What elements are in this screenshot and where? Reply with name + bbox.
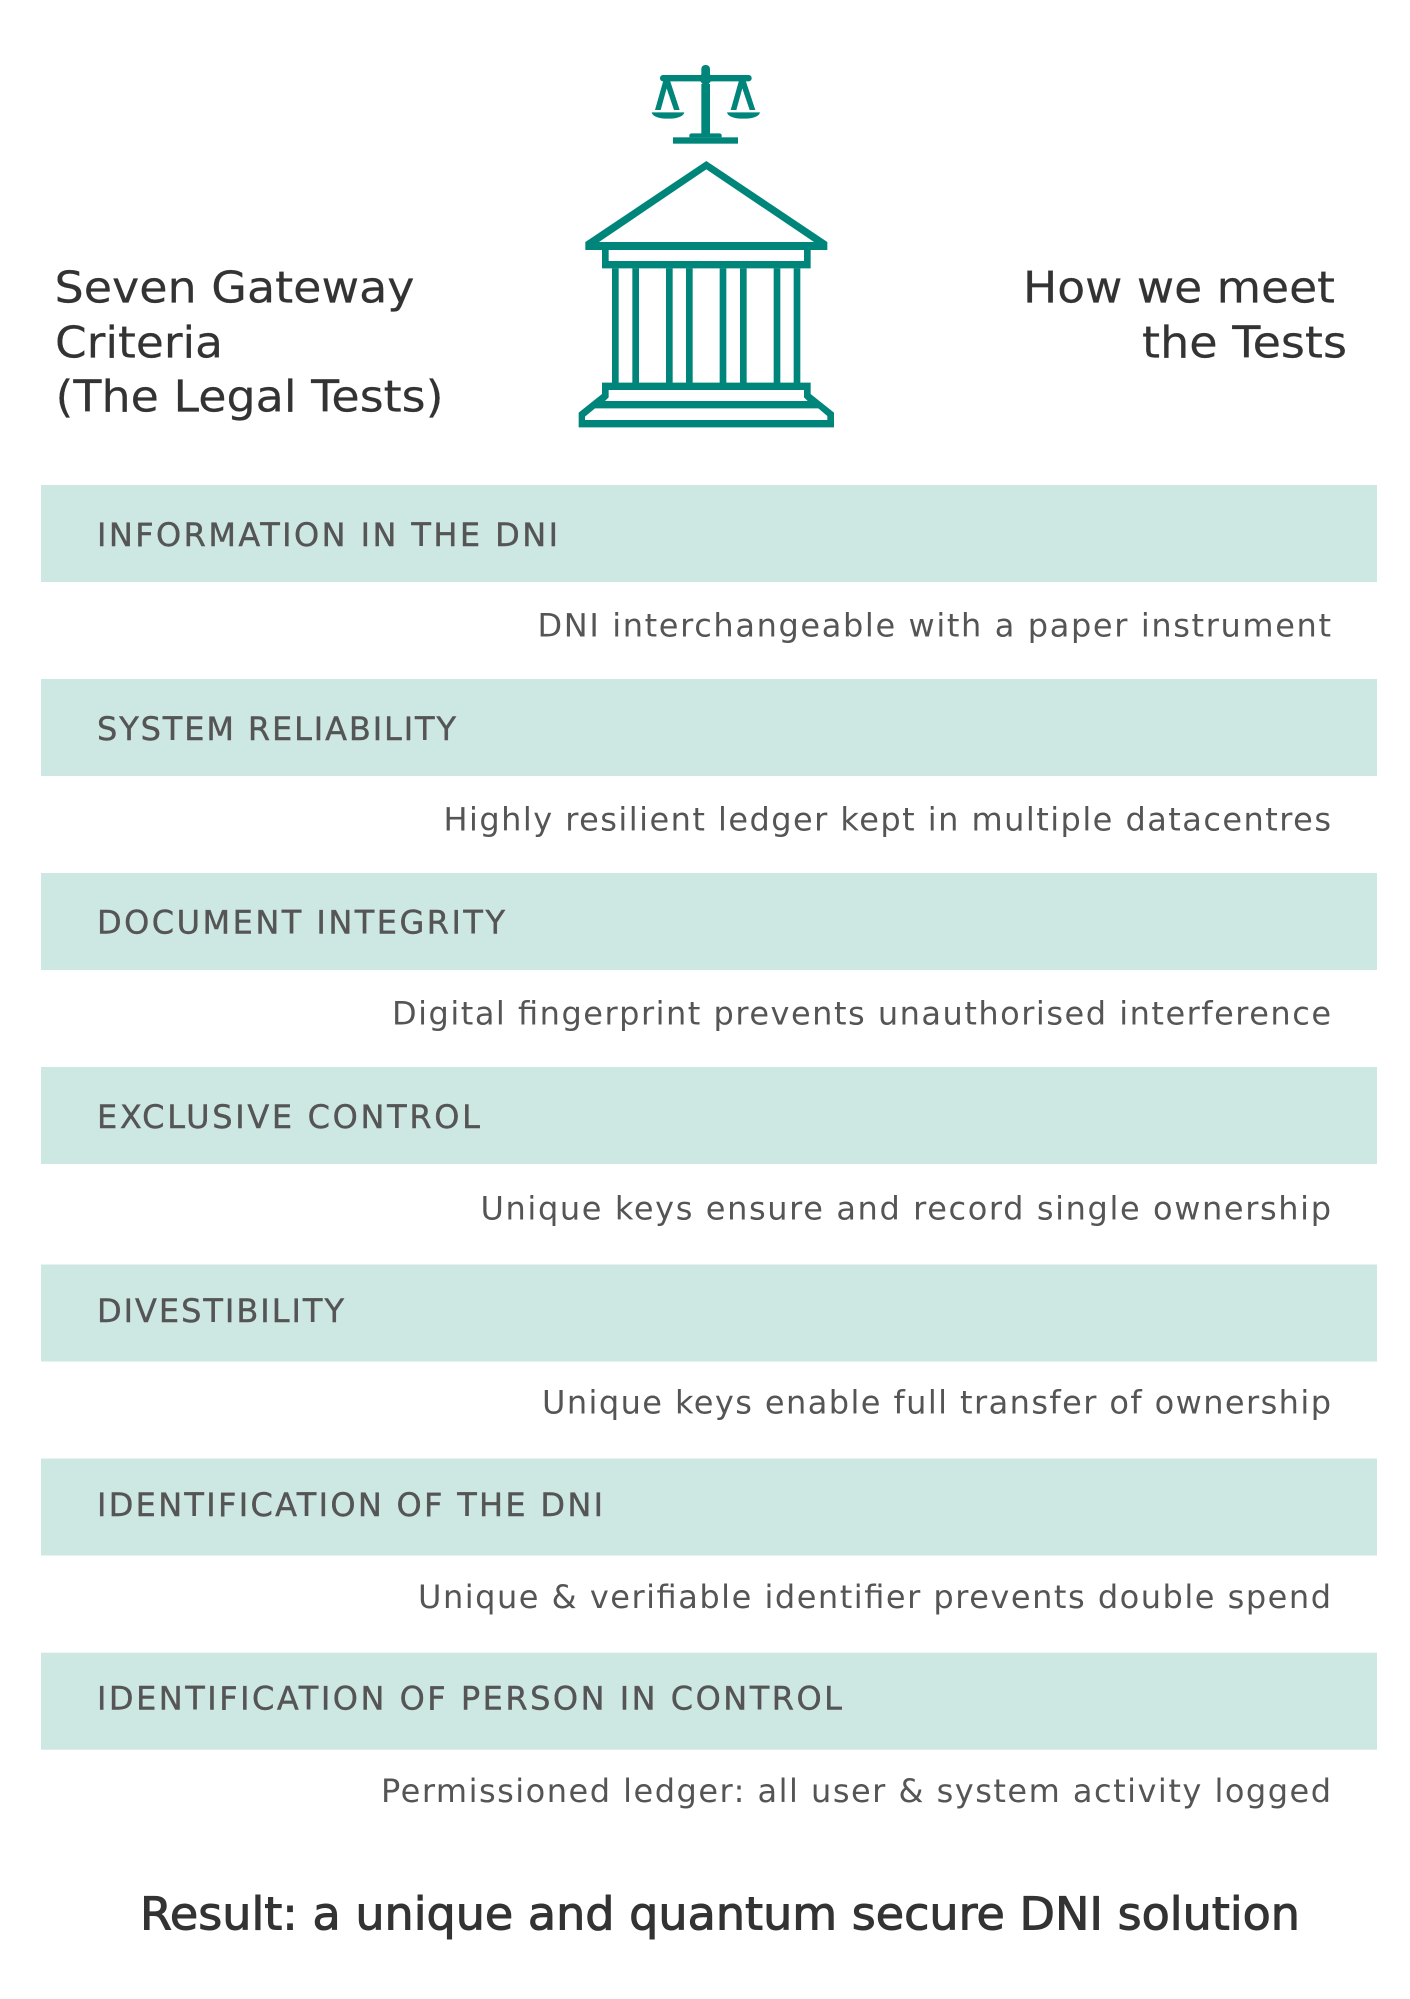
panel: document integrity: Digital fingerprint prevents unauthorised interference bbox=[392, 994, 1331, 1032]
heading: Seven Gateway Criteria (The Legal Tests): Seven Gateway bbox=[54, 263, 414, 314]
panel: information in the DNI: DNI interchangeable with a paper instrument bbox=[538, 606, 1331, 644]
panel: exclusive control: Unique keys ensure and record single ownership bbox=[480, 1190, 1331, 1228]
panel: identification of person in control: Permissioned ledger: all user & system activity logged bbox=[381, 1772, 1331, 1810]
icon: scales of justice bbox=[652, 65, 760, 144]
panel: information in the DNI bbox=[41, 485, 1377, 644]
panel: divestibility: Unique keys enable full transfer of ownership bbox=[542, 1384, 1331, 1422]
panel: system reliability bbox=[41, 679, 1377, 838]
panel: system reliability: SYSTEM RELIABILITY bbox=[97, 710, 456, 748]
panel: system reliability: Highly resilient ledger kept in multiple datacentres bbox=[444, 800, 1331, 838]
panel: exclusive control bbox=[41, 1067, 1377, 1228]
panel: divestibility: DIVESTIBILITY bbox=[97, 1292, 344, 1330]
panel: identification of person in control bbox=[41, 1653, 1377, 1810]
heading: Seven Gateway Criteria (The Legal Tests) bbox=[54, 263, 444, 423]
heading: Seven Gateway Criteria (The Legal Tests): Criteria bbox=[55, 318, 223, 369]
panel: identification of the DNI: IDENTIFICATION OF THE DNI bbox=[97, 1486, 603, 1524]
panel: information in the DNI: INFORMATION IN THE DNI bbox=[97, 516, 558, 554]
panel: divestibility bbox=[41, 1264, 1377, 1422]
heading: How we meet the Tests bbox=[1023, 263, 1347, 369]
panel: document integrity bbox=[41, 873, 1377, 1032]
result statement: Result: a unique and quantum secure DNI solution bbox=[140, 1887, 1300, 1940]
icon: courthouse building bbox=[579, 161, 834, 427]
icon: courthouse with scales of justice bbox=[579, 65, 834, 427]
panel: identification of the DNI: Unique & verifiable identifier prevents double spend bbox=[418, 1578, 1331, 1616]
panel: document integrity: DOCUMENT INTEGRITY bbox=[97, 904, 505, 942]
heading: How we meet the Tests: How we meet bbox=[1023, 263, 1335, 314]
panel: exclusive control: EXCLUSIVE CONTROL bbox=[97, 1098, 480, 1136]
heading: Seven Gateway Criteria (The Legal Tests): (The Legal Tests) bbox=[56, 372, 444, 423]
panel: identification of person in control: IDENTIFICATION OF PERSON IN CONTROL bbox=[97, 1680, 842, 1718]
panel: identification of the DNI bbox=[41, 1458, 1377, 1616]
heading: How we meet the Tests: the Tests bbox=[1142, 318, 1347, 369]
